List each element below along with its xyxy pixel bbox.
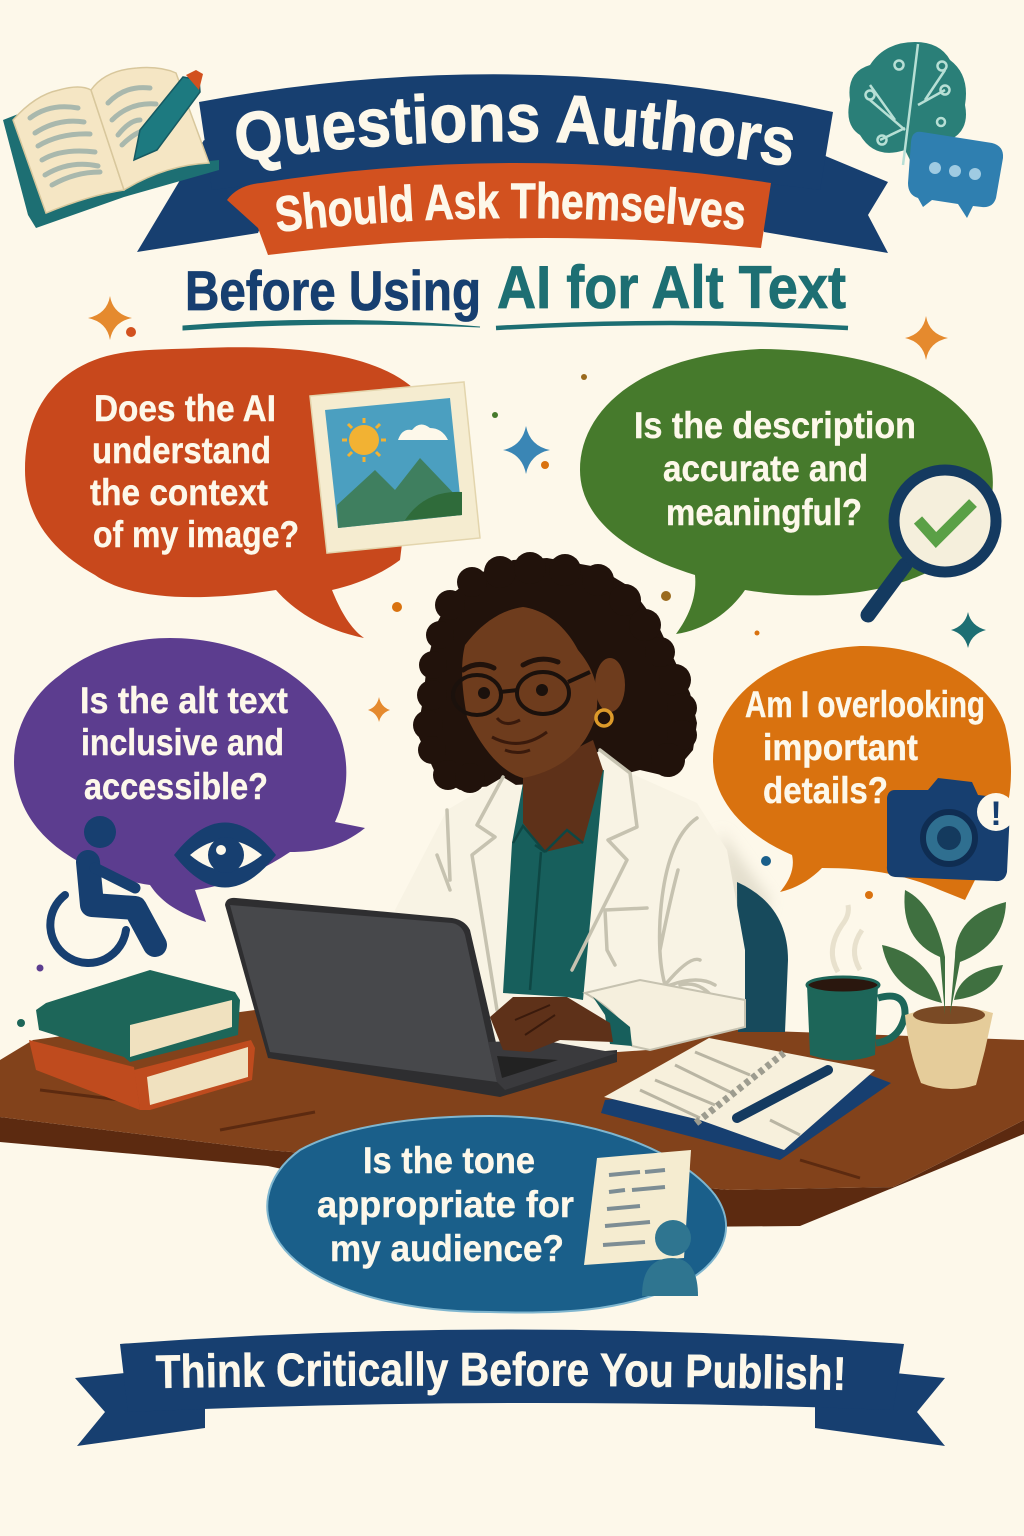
question text (90, 388, 299, 555)
face (462, 607, 597, 778)
subtitle ribbon (227, 163, 771, 255)
chair (737, 882, 788, 1032)
illustration: potted plant (882, 890, 1006, 1089)
decorative sparkles (17, 296, 986, 1027)
hair (413, 552, 697, 793)
illustration: hand and sleeve on keyboard (490, 980, 745, 1052)
neck (523, 740, 603, 852)
heading: before using AI for alt text: AI for Alt Text (497, 254, 846, 321)
question text: details? (763, 770, 888, 811)
heading: before using AI for alt text (183, 254, 848, 330)
icon: camera (887, 778, 1015, 881)
question text: my audience? (330, 1228, 564, 1269)
panel: details bubble (713, 646, 1015, 900)
pen (134, 77, 200, 160)
shirt collar and placket (513, 826, 583, 990)
nose and smile (492, 718, 547, 752)
question text: Does the AI (94, 388, 276, 429)
illustration: stacked books (29, 970, 255, 1110)
question text: Is the tone (363, 1140, 535, 1181)
icon: eye (174, 822, 276, 888)
question text: Is the description (634, 405, 916, 446)
icon: document and reader (584, 1150, 698, 1296)
title line 1: Questions Authors (236, 93, 793, 171)
call to action: Think Critically Before You Publish! (156, 1351, 844, 1396)
illustration: woman at desk (395, 552, 788, 1060)
icon: magnifier with check (868, 470, 996, 615)
icon: brain circuit (848, 42, 966, 170)
question text: appropriate for (317, 1184, 574, 1225)
question text: important (763, 727, 918, 768)
question text: meaningful? (666, 492, 862, 533)
illustration: laptop (225, 898, 617, 1097)
bottom banner (75, 1330, 945, 1446)
coat lapels and folds (437, 750, 715, 1010)
icon: open book and pen (3, 68, 219, 228)
question text: accurate and (663, 448, 868, 489)
question text: of my image? (93, 514, 299, 555)
bottom book (29, 1040, 140, 1110)
panel: tone bubble (267, 1116, 726, 1313)
top book (36, 970, 240, 1062)
eyes (478, 684, 548, 699)
question text: Is the alt text (80, 680, 288, 721)
glasses (453, 672, 590, 715)
shirt (503, 770, 604, 1000)
question text: accessible? (84, 766, 268, 807)
question text (634, 405, 916, 533)
heading: before using AI for alt text: Before Using (185, 259, 481, 322)
coat (395, 750, 745, 1060)
question text: inclusive and (81, 722, 284, 763)
panel: inclusive bubble (14, 638, 365, 963)
question text: understand (92, 430, 271, 471)
question text (745, 684, 985, 811)
question text: the context (90, 472, 268, 513)
panel: accuracy bubble (580, 349, 996, 634)
panel: context bubble (25, 347, 480, 638)
icon: landscape photo (310, 382, 480, 553)
ear and earring (595, 658, 625, 712)
title banner (137, 74, 888, 255)
icon: chat bubble (908, 132, 1003, 218)
question text (317, 1140, 574, 1269)
icon: camera: ! (990, 795, 1002, 833)
desk (0, 1010, 1024, 1228)
subtitle ribbon: Should Ask Themselves (276, 181, 744, 232)
coat shadow (720, 830, 770, 960)
icon: wheelchair user (50, 816, 155, 963)
illustration: coffee mug (807, 905, 905, 1060)
question text (80, 680, 288, 807)
eyebrows (463, 659, 558, 670)
illustration: notebook and pen (601, 1038, 891, 1160)
